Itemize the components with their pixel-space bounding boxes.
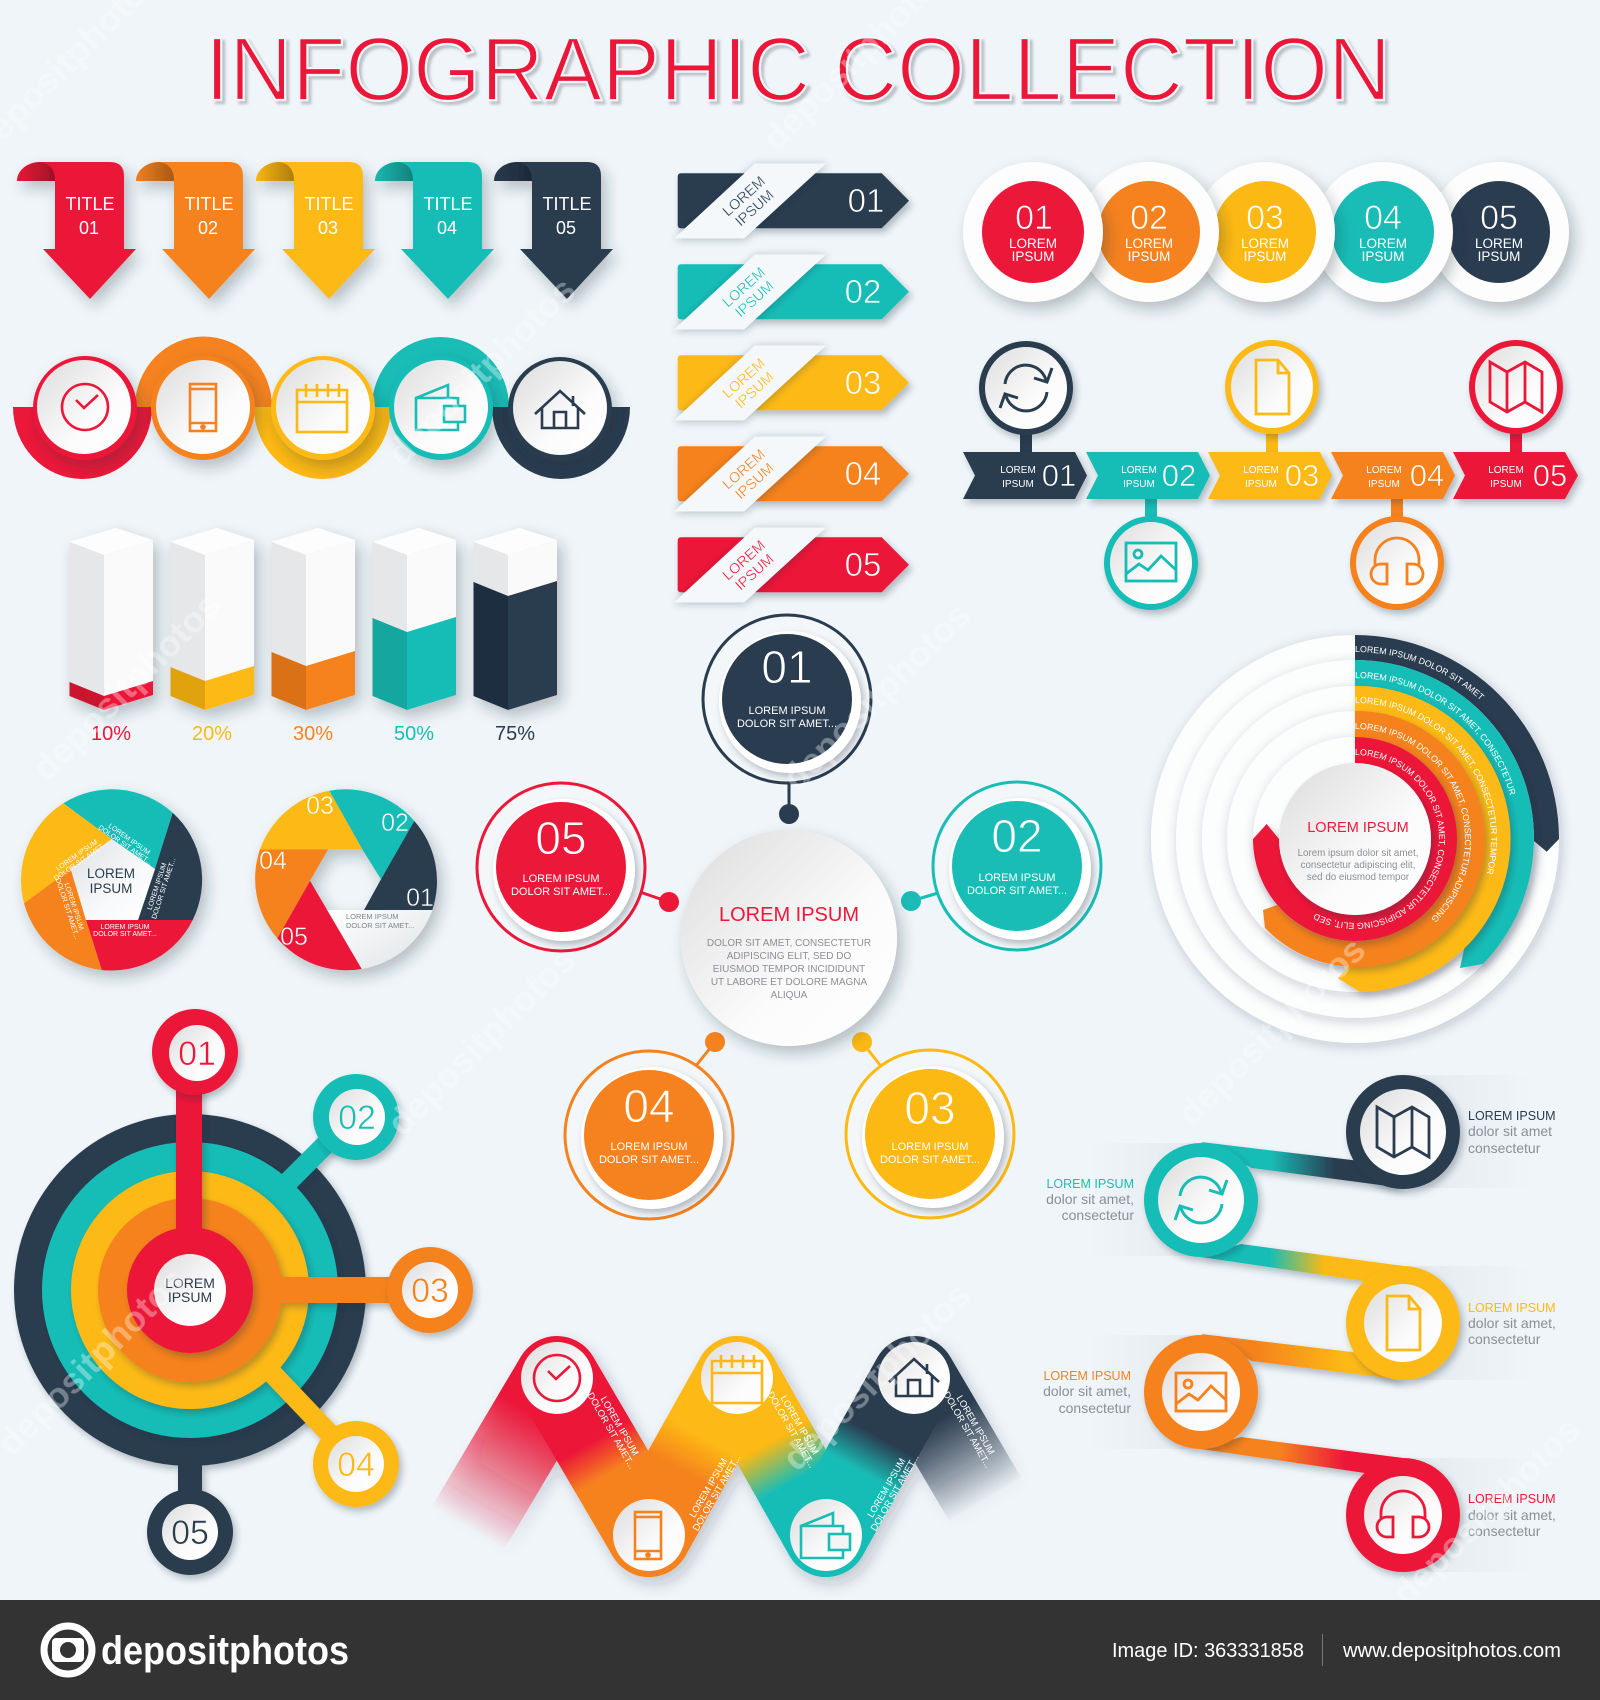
layer teal with 02 stem: [42, 1125, 345, 1438]
arrow 05: TITLE: [542, 194, 592, 214]
circle 02: [1079, 162, 1219, 302]
band labels: LOREM IPSUM DOLOR SIT AMET, CONSECTETUR ADIPISCING ELIT, SED: [1314, 749, 1446, 929]
aperture numbers: 04: [259, 847, 287, 875]
layer orange with 03 stem: [98, 1198, 410, 1382]
ribbon labels: LOREM IPSUM: [866, 1457, 908, 1520]
node 01: LOREM IPSUM: [748, 705, 826, 717]
bar 50%: [372, 528, 456, 710]
arrow 05: 05: [556, 218, 576, 238]
bar 20%: [170, 528, 254, 710]
footer bar: [0, 1600, 1600, 1700]
pie segment labels: LOREM IPSUM: [100, 924, 150, 931]
ribbon 02: LOREM: [720, 265, 769, 311]
node 02: [933, 782, 1101, 950]
icon: wallet: [790, 1499, 862, 1571]
watermark: depositphotos: [1169, 929, 1373, 1133]
chevron 05: [1453, 452, 1578, 499]
panel: right-top numbered ribbons: [674, 164, 909, 602]
ribbon labels: LOREM IPSUM: [688, 1457, 730, 1520]
satellite 04: 04: [337, 1446, 375, 1484]
connectors: [640, 784, 945, 1067]
step red headphones: dolor sit amet,: [1468, 1507, 1556, 1523]
satellite 05: [147, 1489, 233, 1575]
spiral centre: Lorem ipsum dolor sit amet,: [1298, 848, 1418, 859]
pie segment labels: [49, 819, 177, 940]
chevron 03: IPSUM: [1245, 479, 1277, 490]
circle 05: 05: [1480, 199, 1518, 237]
panel: 3D bar chart: [70, 528, 557, 745]
circle 02: 02: [1130, 199, 1168, 237]
icon: image: [1107, 519, 1195, 607]
watermark: depositphotos: [24, 584, 228, 788]
icon: wallet: [389, 356, 493, 460]
hub centre: LOREM IPSUM: [719, 904, 859, 926]
icon: calendar: [271, 356, 375, 460]
node 02: DOLOR SIT AMET...: [967, 885, 1067, 897]
arrow 02: 02: [198, 218, 218, 238]
icon: headphones: [1353, 519, 1441, 607]
step yellow document: dolor sit amet,: [1468, 1315, 1556, 1331]
icon: map: [1472, 343, 1560, 431]
circle 03: [1195, 162, 1335, 302]
aperture label: DOLOR SIT AMET...: [346, 921, 414, 930]
pie segment labels: LOREM IPSUM: [107, 823, 151, 857]
ribbon shape: [452, 1378, 1005, 1555]
bar 10%: [70, 528, 153, 710]
arrow 01: TITLE: [65, 194, 115, 214]
ribbon labels: DOLOR SIT AMET...: [764, 1390, 817, 1470]
ribbon 03: [674, 346, 909, 420]
bar labels: [91, 723, 535, 745]
ribbon 04: [674, 436, 909, 512]
node 05: [477, 783, 645, 951]
icon: house: [878, 1342, 950, 1414]
stems: [1020, 430, 1522, 521]
chevron 02: IPSUM: [1123, 479, 1155, 490]
bar labels: 30%: [293, 723, 333, 745]
aperture label: LOREM IPSUM: [346, 912, 399, 921]
ribbon 05: 05: [845, 546, 881, 583]
ribbon 03: IPSUM: [733, 369, 777, 412]
chevron 01: LOREM: [1000, 465, 1036, 476]
chevron 04: 04: [1410, 458, 1444, 493]
icon: sync: [982, 344, 1070, 432]
step red headphones: LOREM IPSUM: [1468, 1492, 1556, 1506]
footer image id: Image ID: 363331858: [1112, 1640, 1304, 1662]
target centre: IPSUM: [168, 1289, 212, 1305]
band labels: LOREM IPSUM DOLOR SIT AMET: [1356, 646, 1485, 699]
ribbon 01: [674, 164, 909, 238]
node 01: DOLOR SIT AMET...: [737, 718, 837, 730]
ribbon labels: LOREM IPSUM: [598, 1395, 640, 1458]
spiral centre: consectetur adipiscing elit,: [1301, 860, 1415, 871]
step orange image: dolor sit amet,: [1043, 1383, 1131, 1399]
chevron 04: IPSUM: [1368, 479, 1400, 490]
step teal sync: LOREM IPSUM: [1046, 1177, 1134, 1191]
label shade bands: [1090, 1075, 1533, 1572]
step navy map: LOREM IPSUM: [1468, 1109, 1556, 1123]
step teal sync: [1046, 1143, 1258, 1257]
watermark: depositphotos: [379, 269, 583, 473]
panel: target diagram: [14, 1009, 473, 1575]
hub centre: [681, 830, 897, 1046]
node 04: DOLOR SIT AMET...: [599, 1154, 699, 1166]
panel: numbered circles row: [963, 162, 1569, 302]
arrow 01: [17, 162, 136, 299]
ribbon 05: IPSUM: [733, 551, 777, 594]
node 03: LOREM IPSUM: [891, 1141, 969, 1153]
circle 02: LOREM: [1125, 236, 1173, 251]
bar labels: 20%: [192, 723, 232, 745]
step orange image: LOREM IPSUM: [1043, 1369, 1131, 1383]
chevron 03: 03: [1285, 458, 1319, 493]
node 01: 01: [761, 641, 813, 693]
circle 04: LOREM: [1359, 236, 1407, 251]
ribbon 02: [674, 254, 909, 330]
node 03: [846, 1050, 1014, 1218]
band labels: LOREM IPSUM DOLOR SIT AMET, CONSECTETUR: [1356, 672, 1516, 796]
chevron 04: LOREM: [1366, 465, 1402, 476]
hub centre: EIUSMOD TEMPOR INCIDIDUNT: [713, 964, 865, 975]
band labels: [1314, 646, 1516, 929]
ribbon 02: IPSUM: [733, 278, 777, 321]
chevron 01: 01: [1042, 458, 1076, 493]
ribbon 04: LOREM: [720, 447, 769, 493]
satellite 01: [152, 1009, 238, 1095]
node 02: 02: [991, 810, 1043, 862]
circle 01: LOREM: [1009, 236, 1057, 251]
chevron 02: 02: [1162, 458, 1196, 493]
node 05: DOLOR SIT AMET...: [511, 886, 611, 898]
footer logo: depositphotos: [101, 1629, 349, 1673]
panel: central hub diagram: [477, 615, 1101, 1219]
circle 01: [963, 162, 1103, 302]
satellite 01: 01: [178, 1035, 216, 1073]
icon: document: [1228, 343, 1316, 431]
circle 03: LOREM: [1241, 236, 1289, 251]
ribbon labels: DOLOR SIT AMET...: [869, 1453, 922, 1533]
ribbon 01: 01: [848, 182, 884, 219]
footer url: www.depositphotos.com: [1342, 1640, 1561, 1662]
watermark: depositphotos: [774, 1274, 978, 1478]
ribbon 05: LOREM: [720, 538, 769, 584]
pie segment labels: DOLOR SIT AMET...: [93, 931, 157, 938]
node 04: [565, 1051, 733, 1219]
step yellow document: [1346, 1266, 1556, 1380]
step yellow document: LOREM IPSUM: [1468, 1301, 1556, 1315]
pie segment labels: LOREM IPSUM: [147, 862, 169, 911]
chevron 01: [963, 452, 1087, 499]
circle 05: IPSUM: [1478, 249, 1520, 264]
pie segment labels: LOREM IPSUM: [63, 882, 84, 931]
footer logo: [44, 1626, 349, 1674]
ribbon 04: 04: [845, 455, 881, 492]
arrow 04: 04: [437, 218, 457, 238]
hub centre: ALIQUA: [771, 990, 808, 1001]
satellite 03: 03: [411, 1272, 449, 1310]
step orange image: consectetur: [1059, 1400, 1131, 1416]
hub centre: UT LABORE ET DOLORE MAGNA: [711, 977, 867, 988]
watermark: depositphotos: [774, 594, 978, 798]
spiral centre: LOREM IPSUM: [1307, 820, 1409, 836]
chevron 04: [1331, 452, 1455, 499]
arrow 03: [256, 162, 375, 299]
step navy map: consectetur: [1468, 1140, 1541, 1156]
node 05: LOREM IPSUM: [522, 873, 600, 885]
ribbon labels: DOLOR SIT AMET...: [940, 1390, 993, 1470]
circle 04: 04: [1364, 199, 1402, 237]
ribbon labels: LOREM IPSUM: [954, 1394, 996, 1457]
satellite 04: [313, 1421, 399, 1507]
ribbon 05: [674, 528, 909, 602]
ribbon 01: LOREM: [720, 174, 769, 220]
watermark: depositphotos: [1384, 1409, 1588, 1613]
step orange image: [1043, 1335, 1258, 1449]
bar 75%: [474, 528, 557, 710]
band labels: LOREM IPSUM DOLOR SIT AMET, CONSECTETUR TEMPOR: [1356, 697, 1498, 874]
bar labels: 75%: [495, 723, 535, 745]
ribbon labels: [584, 1385, 1001, 1533]
spiral centre: sed do eiusmod tempor: [1307, 872, 1410, 883]
chevron 02: LOREM: [1121, 465, 1157, 476]
arrow 03: 03: [318, 218, 338, 238]
bar labels: 50%: [394, 723, 434, 745]
hub centre: DOLOR SIT AMET, CONSECTETUR: [707, 938, 871, 949]
icon: house: [508, 357, 612, 461]
node 03: 03: [904, 1082, 956, 1134]
teal band: [1355, 660, 1534, 968]
satellite 02: 02: [338, 1099, 376, 1137]
ribbon labels: DOLOR SIT AMET...: [691, 1453, 744, 1533]
aperture numbers: [259, 792, 434, 951]
navy band: [1355, 635, 1559, 852]
hub centre: ADIPISCING ELIT, SED DO: [727, 951, 851, 962]
icon: clock: [521, 1342, 593, 1414]
circle 04: [1313, 162, 1453, 302]
pie segment labels: DOLOR SIT AMET...: [53, 840, 109, 883]
node 04: 04: [623, 1080, 675, 1132]
step red headphones: [1346, 1458, 1556, 1572]
red band: [1253, 737, 1457, 941]
pie centre label: IPSUM: [90, 881, 132, 896]
panel: aperture pie chart: [255, 789, 437, 970]
arrow 01: 01: [79, 218, 99, 238]
step teal sync: consectetur: [1062, 1207, 1134, 1223]
arrow 03: TITLE: [304, 194, 354, 214]
circle 02: IPSUM: [1128, 249, 1170, 264]
target centre: LOREM: [165, 1275, 215, 1291]
pie centre label: LOREM: [87, 866, 135, 881]
chevron 02: [1086, 452, 1210, 499]
node 03: DOLOR SIT AMET...: [880, 1154, 980, 1166]
panel: chevron timeline: [963, 343, 1578, 607]
ribbon 04: IPSUM: [733, 460, 777, 503]
aperture numbers: 05: [280, 923, 308, 951]
spiral centre: [1279, 763, 1431, 915]
watermark: depositphotos: [379, 939, 583, 1143]
layer yellow with 04 stem: [71, 1171, 345, 1450]
chevron 03: [1208, 452, 1332, 499]
satellite 02: [313, 1074, 399, 1160]
bar labels: 10%: [91, 723, 131, 745]
layer red with 01 stem: [127, 1060, 253, 1353]
arrow 04: TITLE: [423, 194, 473, 214]
ribbon labels: DOLOR SIT AMET...: [584, 1391, 637, 1471]
layer navy with 05 stem: [14, 1114, 366, 1510]
chevron 03: LOREM: [1243, 465, 1279, 476]
circle 01: IPSUM: [1012, 249, 1054, 264]
satellite 05: 05: [171, 1514, 209, 1552]
step navy map: dolor sit amet: [1468, 1123, 1552, 1139]
circle 03: IPSUM: [1244, 249, 1286, 264]
node 02: LOREM IPSUM: [978, 872, 1056, 884]
pie segment labels: LOREM IPSUM: [55, 839, 99, 873]
target centre: [154, 1254, 226, 1326]
satellite 03: [387, 1247, 473, 1333]
circle 05: [1429, 162, 1569, 302]
ribbon 03: 03: [845, 364, 881, 401]
panel: wave of icon circles: [13, 337, 630, 479]
step yellow document: consectetur: [1468, 1331, 1541, 1347]
panel: pentagon pie chart: [21, 789, 202, 970]
chevron 05: LOREM: [1488, 465, 1524, 476]
aperture numbers: 02: [381, 809, 409, 837]
panel: zigzag ribbon: [452, 1342, 1005, 1571]
arrow 02: TITLE: [184, 194, 234, 214]
orange band: [1263, 711, 1485, 967]
title: INFOGRAPHIC COLLECTION: [205, 20, 1391, 120]
ribbon labels: LOREM IPSUM: [778, 1394, 820, 1457]
step red headphones: consectetur: [1468, 1523, 1541, 1539]
node 05: 05: [535, 812, 587, 864]
white concentric rings: [1151, 635, 1559, 1043]
arrow 04: [375, 162, 494, 299]
icon: phone: [613, 1499, 685, 1571]
connector dots: [659, 804, 921, 1052]
step navy map: [1346, 1075, 1556, 1189]
aperture numbers: 03: [306, 792, 334, 820]
icon: phone: [151, 356, 255, 460]
pie segment labels: DOLOR SIT AMET...: [151, 857, 177, 920]
step teal sync: dolor sit amet,: [1046, 1191, 1134, 1207]
connector bands: [1201, 1142, 1403, 1473]
circle 03: 03: [1246, 199, 1284, 237]
band labels: LOREM IPSUM DOLOR SIT AMET, CONSECTETUR ADIPISCING: [1356, 723, 1472, 922]
pie segment labels: DOLOR SIT AMET...: [54, 877, 80, 940]
circle 05: LOREM: [1475, 236, 1523, 251]
panel: S-curve timeline: [1043, 1075, 1556, 1572]
panel: spiral radial bars: [1147, 632, 1567, 1052]
yellow band: [1338, 686, 1511, 992]
ribbon 01: IPSUM: [733, 187, 777, 230]
icon: calendar: [701, 1342, 773, 1414]
chevron 05: 05: [1533, 458, 1567, 493]
icon: clock: [33, 356, 137, 460]
chevron 01: IPSUM: [1002, 479, 1034, 490]
ribbon 02: 02: [845, 273, 881, 310]
chevron 05: IPSUM: [1490, 479, 1522, 490]
aperture numbers: 01: [406, 884, 434, 912]
node 04: LOREM IPSUM: [610, 1141, 688, 1153]
arrow 02: [136, 162, 255, 299]
panel: folded ribbon arrows: [17, 162, 613, 299]
circle 01: 01: [1015, 199, 1053, 237]
pie segment labels: DOLOR SIT AMET...: [97, 824, 153, 867]
ribbon 03: LOREM: [720, 356, 769, 402]
arrow 05: [494, 162, 613, 299]
node 01: [703, 615, 871, 783]
bar 30%: [272, 528, 355, 710]
circle 04: IPSUM: [1362, 249, 1404, 264]
